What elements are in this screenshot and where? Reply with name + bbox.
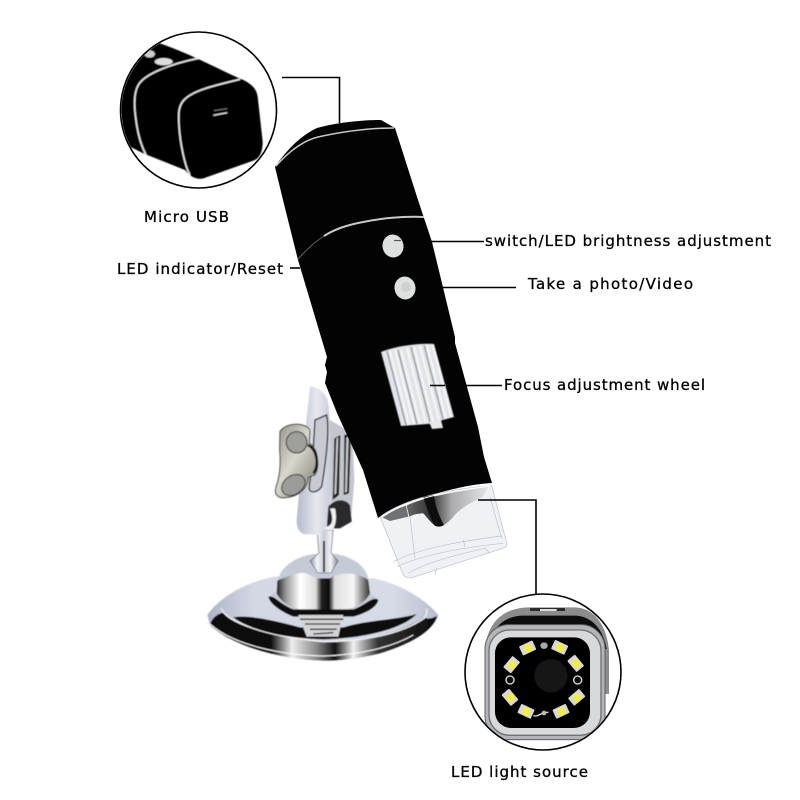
plate recess (309, 415, 328, 492)
stem (310, 530, 338, 573)
leader: LED indicator (290, 267, 300, 269)
wing nut (275, 424, 318, 500)
body silver rings (276, 128, 424, 259)
leader: Take a photo (442, 286, 516, 288)
microscope body (275, 120, 492, 518)
label: Focus adjustment wheel: Focus adjustment wheel (504, 376, 705, 394)
inset: micro USB port (117, 32, 277, 188)
leader: switch (430, 240, 484, 242)
leader: Focus wheel (430, 384, 502, 386)
clear LED cap (380, 486, 507, 578)
label: Micro USB: Micro USB (144, 208, 229, 226)
focus wheel (381, 344, 454, 429)
button: switch (380, 233, 406, 259)
label: LED indicator/Reset: LED indicator/Reset (117, 260, 283, 278)
label: Take a photo/Video: Take a photo/Video (527, 275, 693, 293)
LEDs (501, 640, 585, 719)
infographic canvas (118, 31, 771, 780)
leader: Micro USB (282, 78, 340, 123)
button: photo (392, 275, 418, 301)
microscope stand (207, 387, 438, 661)
leader: LED light source (478, 500, 536, 594)
inset: LED ring (465, 594, 621, 750)
clamp (324, 420, 354, 530)
dome (268, 554, 378, 616)
label: LED light source: LED light source (451, 763, 588, 781)
tilt plate (297, 387, 333, 535)
round chrome base (207, 554, 438, 661)
label: switch/LED brightness adjustment: switch/LED brightness adjustment (485, 232, 771, 250)
